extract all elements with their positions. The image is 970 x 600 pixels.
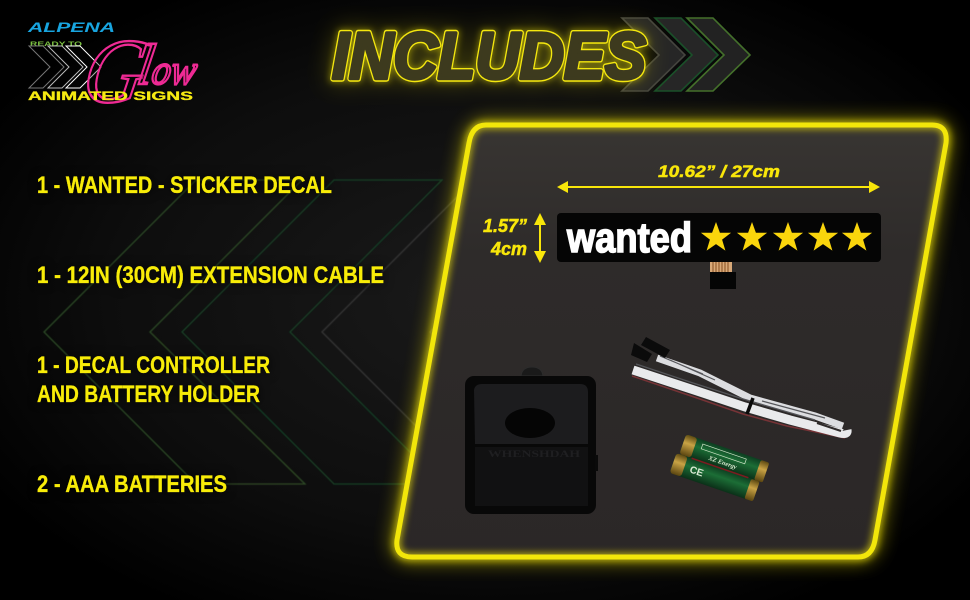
title: INCLUDES: INCLUDES xyxy=(332,18,646,92)
logo script word: ow xyxy=(149,46,201,93)
title: INCLUDES: INCLUDES xyxy=(332,18,646,92)
item 3 xyxy=(37,352,270,408)
logo: Alpena Ready to Glow xyxy=(26,20,206,123)
cable red edge xyxy=(632,376,845,438)
logo chevrons xyxy=(29,46,101,88)
AAA batteries xyxy=(670,433,769,503)
cable connectors xyxy=(631,343,652,362)
title: INCLUDES: INCLUDES xyxy=(332,18,646,92)
decal wanted wordmark: wanted xyxy=(566,214,692,261)
title chevrons xyxy=(622,18,750,91)
battery bottom: CE xyxy=(688,465,705,480)
title: INCLUDES: INCLUDES xyxy=(332,18,646,92)
item 3: 1 - DECAL CONTROLLER xyxy=(37,352,270,379)
cable lower ribbon xyxy=(633,370,847,434)
battery top: XZ Energy xyxy=(706,455,738,471)
item 3: AND BATTERY HOLDER xyxy=(37,381,260,408)
cable loop gap xyxy=(817,423,841,431)
background chevrons xyxy=(44,180,582,484)
cable tie xyxy=(747,398,753,414)
item 4: 2 - AAA BATTERIES xyxy=(37,471,227,498)
list: included items xyxy=(37,172,384,498)
decal stars xyxy=(701,222,872,251)
width dimension label: 10.62” / 27cm xyxy=(658,162,780,181)
controller and battery holder xyxy=(465,367,598,514)
cable upper ribbon xyxy=(657,358,843,426)
height dimension label: 1.57” xyxy=(483,216,527,236)
logo script word: G xyxy=(76,21,154,123)
arrow: width xyxy=(557,181,880,193)
decal body xyxy=(557,213,881,262)
controller side switch xyxy=(595,455,598,471)
panel neon border xyxy=(397,125,946,557)
logo brand name: ALPENA xyxy=(26,20,115,35)
panel fill xyxy=(397,125,946,557)
extension cable xyxy=(631,337,847,438)
panel inner glow xyxy=(397,125,946,557)
controller upper face xyxy=(474,384,588,444)
logo subtitle: ANIMATED SIGNS xyxy=(28,91,194,103)
height dimension label: 4cm xyxy=(490,239,527,259)
decal ribbon connector xyxy=(710,261,736,289)
item 2: 1 - 12IN (30CM) EXTENSION CABLE xyxy=(37,262,384,289)
item 1: 1 - WANTED - STICKER DECAL xyxy=(37,172,332,199)
controller embossed lettering: WHENSHDAH xyxy=(488,449,580,459)
arrow: height xyxy=(534,213,546,263)
controller tab xyxy=(521,367,543,376)
controller switch recess xyxy=(505,408,555,438)
logo tagline: READY TO xyxy=(30,41,82,48)
height dimension label xyxy=(483,216,527,259)
controller lower face xyxy=(475,447,588,506)
panel xyxy=(397,125,946,557)
cable wire lines xyxy=(636,356,825,420)
panel glow xyxy=(397,125,946,557)
controller outer shell xyxy=(465,376,596,514)
decal sticker xyxy=(557,213,881,289)
logo script word: l xyxy=(133,33,159,98)
